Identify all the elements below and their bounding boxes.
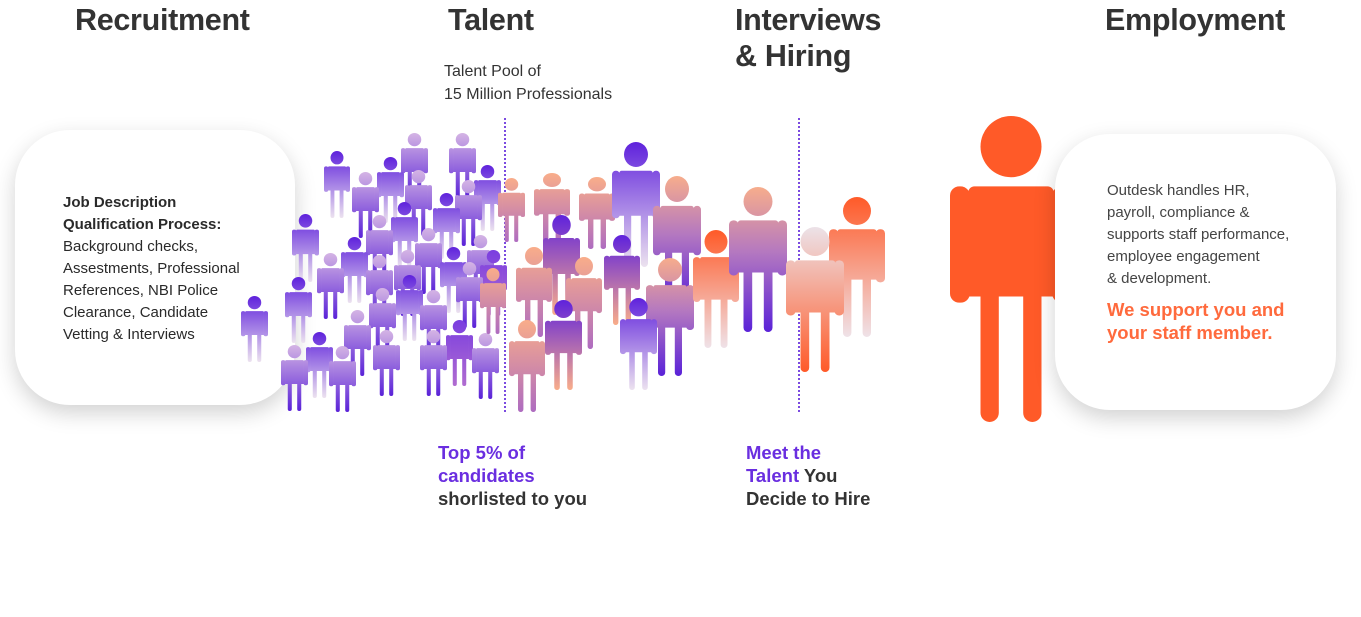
people: purple cluster [241, 133, 507, 412]
icon: employed person [950, 116, 1072, 422]
heading: Talent: Talent [448, 3, 534, 37]
text: recruitment process: Assestments, Professional [63, 260, 240, 277]
heading: Interviews & Hiring: Interviews [735, 3, 881, 37]
text: employment description: Outdesk handles HR, [1107, 182, 1250, 199]
text: recruitment process: Job Description [63, 194, 176, 211]
text: recruitment process: Background checks, [63, 238, 198, 255]
text: recruitment process: Vetting & Interviews [63, 326, 195, 343]
heading: Interviews & Hiring [735, 3, 881, 73]
callout: top 5% [438, 442, 587, 509]
callout: top 5%: shorlisted to you [438, 488, 587, 509]
text: employment description: employee engagement [1107, 248, 1260, 265]
callout: meet the talent [746, 442, 870, 509]
text: employment description: & development. [1107, 270, 1211, 287]
text: employment description: supports staff performance, [1107, 226, 1289, 243]
text: employment description [1107, 182, 1289, 343]
callout: support: your staff member. [1107, 322, 1273, 343]
people: talent shortlist [498, 142, 787, 412]
callout: meet the talent: Meet the [746, 442, 821, 463]
text: recruitment process [63, 194, 240, 343]
text: talent pool [444, 63, 612, 103]
text: talent pool: 15 Million Professionals [444, 86, 612, 103]
panel: recruitment card [15, 130, 295, 405]
callout: top 5%: candidates [438, 465, 535, 486]
people: hiring [786, 197, 885, 372]
callout: meet the talent: Talent You [746, 465, 837, 486]
heading: Employment: Employment [1105, 3, 1285, 37]
panel: employment card [1055, 134, 1336, 410]
text: talent pool: Talent Pool of [444, 63, 541, 80]
text: employment description: payroll, compliance & [1107, 204, 1250, 221]
text: recruitment process: Clearance, Candidate [63, 304, 208, 321]
text: recruitment process: References, NBI Police [63, 282, 218, 299]
heading: Interviews & Hiring: & Hiring [735, 39, 851, 73]
text: recruitment process: Qualification Process: [63, 216, 221, 233]
callout: support [1107, 299, 1284, 343]
heading: Recruitment: Recruitment [75, 3, 250, 37]
callout: meet the talent: Decide to Hire [746, 488, 870, 509]
callout: support: We support you and [1107, 299, 1284, 320]
divider lines [505, 118, 799, 413]
callout: top 5%: Top 5% of [438, 442, 525, 463]
